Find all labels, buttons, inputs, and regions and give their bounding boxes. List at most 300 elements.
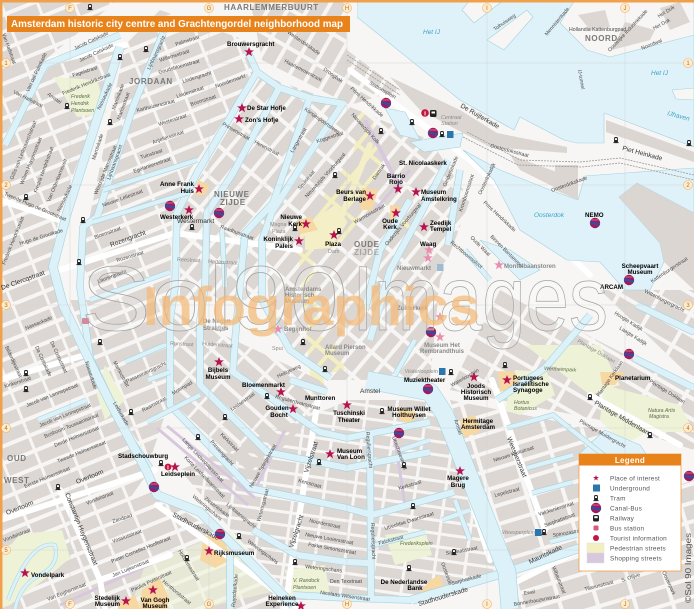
street labels: Weteringschans — [305, 564, 343, 575]
places of interest: Allard Pierson — [325, 345, 366, 351]
street labels: Stationsplein — [368, 81, 397, 101]
street labels: Tilanusstraat — [584, 579, 615, 593]
district labels: OUDE — [354, 240, 380, 249]
street labels: Het Dok — [652, 17, 672, 32]
district labels: JORDAAN — [129, 77, 173, 86]
places of interest: Scheepvaart — [622, 263, 658, 270]
street labels: Magistra — [649, 414, 669, 420]
street labels: Jacob van Lennepstraat — [26, 382, 80, 409]
places of interest: Theater — [338, 417, 361, 424]
street labels: Utrechtsestraat — [390, 436, 408, 471]
places of interest: Museum — [421, 189, 447, 196]
street labels: Waterlooplein — [450, 368, 480, 389]
street labels: Mauritskade — [528, 544, 564, 566]
grid reference letters: F — [68, 6, 72, 12]
water labels: Het IJ — [423, 29, 441, 36]
legend: railway: Railway — [610, 516, 635, 522]
places of interest: Zon's Hofje — [245, 117, 279, 124]
places of interest: Kerk — [383, 224, 397, 231]
shopping streets — [60, 120, 410, 605]
street labels: Bonnerhauzenstraat — [513, 594, 561, 608]
street labels: Utrechtse Dwarsstraat — [384, 511, 435, 532]
street labels: Oosterdoksdijk — [477, 162, 497, 196]
street labels: Derde Helmersstraat — [54, 425, 101, 449]
street labels: Lindengracht — [182, 70, 213, 85]
street labels: Jacob Catskade — [73, 31, 110, 52]
places of interest: Kerk — [288, 221, 303, 228]
street labels: Marnixstraat — [111, 360, 130, 389]
places of interest: Tempel — [430, 226, 451, 233]
street labels: Eerste Helmersstraat — [24, 466, 71, 490]
street labels: Spuistraat — [297, 169, 317, 191]
district labels: NIEUWE — [214, 190, 250, 199]
grid reference letters: 4 — [4, 426, 8, 432]
grid reference letters: F — [68, 602, 72, 608]
street labels: Ewal — [523, 589, 535, 597]
street labels: Damrak — [372, 162, 387, 181]
street labels: Lepelstraat — [494, 486, 521, 499]
places of interest: Joods — [467, 383, 486, 390]
street labels: Noorderstraat — [309, 518, 341, 531]
street labels: Vondelstraat — [3, 527, 32, 544]
street labels: Van Eeghenstraat — [47, 582, 87, 603]
street labels: Rozengracht — [109, 229, 147, 249]
street labels: V. Randock — [293, 578, 320, 584]
street labels: Geldersekade — [442, 155, 460, 188]
street labels: Prins Hendrikkade — [349, 86, 384, 119]
street labels: Westzijde Marnixstraat — [93, 144, 119, 196]
street labels: Nassaukade — [56, 184, 74, 213]
street labels: Fredrik Hendrikstraat — [33, 146, 56, 194]
street labels: Sarphatistraat — [544, 512, 577, 529]
street labels: Nieuwe Kerkstraat — [493, 445, 535, 464]
street labels: Laagte Kadijk — [618, 326, 648, 348]
legend: underground: Underground — [610, 486, 650, 492]
places of interest: Berlage — [343, 196, 367, 203]
street labels: Van Hallstraat — [0, 33, 17, 65]
places of interest: Zeedijk — [430, 220, 452, 227]
underground stations: Waterlooplein — [405, 369, 438, 375]
street labels: Het Dok — [657, 4, 676, 20]
places of interest: Museum — [205, 374, 231, 381]
street labels: Amstel — [46, 92, 62, 106]
street labels: Lijnbaansgracht — [146, 35, 168, 71]
street labels: Willemsstraat — [159, 48, 191, 64]
street labels: Marnixkade — [111, 83, 126, 111]
street labels: Vijzelstraat — [303, 441, 320, 474]
street labels: Valckenierstraat — [538, 501, 575, 518]
street labels: Huidenstraat — [202, 341, 233, 350]
places of interest: Gouden — [265, 405, 289, 412]
street labels: Oosterdoksstraat — [489, 143, 530, 159]
places of interest: NEMO — [585, 212, 604, 219]
street labels: Prinsengracht — [209, 439, 235, 468]
places of interest: Portugees — [513, 375, 544, 382]
places of interest: Hermitage — [463, 418, 494, 425]
street labels: Jacob Catskade — [78, 43, 115, 64]
street labels: Korte Leidsedwarsstraat — [183, 455, 226, 500]
canal-bus stops — [149, 98, 694, 539]
legend: place of interest: Place of interest — [610, 476, 660, 482]
grid reference letters: 2 — [686, 183, 690, 189]
street labels: Plantage Kerklaan — [596, 360, 625, 398]
places of interest: Montelbaanstoren — [504, 264, 556, 270]
street labels: Raamstraat — [141, 396, 168, 414]
street labels: Hortus — [514, 400, 530, 406]
street labels: Nieuwezijds Kolk — [350, 112, 380, 146]
places of interest: Bloemenmarkt — [242, 382, 285, 389]
street labels: Van der Palmkade — [25, 52, 49, 93]
street labels: Lijnbaansgracht — [106, 144, 125, 181]
street labels: Kerkstraat — [398, 479, 423, 492]
grid reference letters: 3 — [4, 303, 8, 309]
street labels: Regulierdwarsstraat — [274, 394, 321, 412]
grid reference letters: I — [486, 6, 488, 12]
pedestrian streets — [295, 110, 420, 395]
street labels: Oosterpark — [660, 570, 677, 596]
street labels: Vijzelgracht — [288, 514, 305, 549]
street labels: Constantijn Huygensstraat — [63, 492, 99, 567]
street labels: S. Olijve — [621, 572, 641, 584]
street labels: Hobbemastraat — [176, 549, 200, 583]
places of interest: Experience — [265, 601, 299, 608]
grid reference letters: 4 — [686, 426, 690, 432]
street labels: Prinsenstraat — [221, 122, 251, 142]
central station tourist info and railway icons: i — [424, 110, 426, 118]
places of interest: Museum Willet — [387, 406, 431, 413]
street labels: Nicolaas Witsenstraat — [320, 590, 371, 603]
street labels: Oosterdokskade — [551, 175, 588, 194]
places of interest: De Negen — [203, 319, 231, 325]
water labels — [423, 29, 691, 219]
street labels: Weteringschans — [246, 539, 279, 566]
street labels: Korsjespoortsteeg — [303, 107, 341, 136]
street labels: Rechtboomssloot — [449, 240, 484, 271]
street labels: Oudezijds Voorburgwal — [384, 203, 423, 247]
watermark: Infographics: Infographics — [143, 275, 480, 337]
street labels: Frederik Hendrikstraat — [1, 215, 26, 266]
places of interest: Anne Frank — [160, 181, 195, 188]
street labels: Pieter Cornelisz Hooftstraat — [111, 535, 172, 565]
street labels: Mennistenkade — [544, 6, 571, 37]
station and Kattenburg land — [390, 77, 694, 290]
street labels: Hugo de Grootkade — [19, 228, 64, 247]
places of interest: Museum Het — [424, 343, 460, 349]
street labels: Piet Heinkade — [621, 145, 663, 163]
street labels: Fokke Simonszstraat — [308, 542, 357, 556]
street labels: Frederiksplein — [400, 541, 433, 547]
places of interest: Rembrandthuis — [420, 349, 465, 355]
places of interest: Stedelijk — [95, 595, 121, 602]
street labels: Den Texstraat — [330, 579, 362, 585]
street labels: Passeerdersgracht — [125, 361, 168, 385]
street labels: Natura Artis — [648, 408, 676, 414]
places of interest: De Nederlandse — [381, 579, 428, 586]
places of interest: Israëlitische — [513, 381, 549, 388]
street labels: Karthuizersstraat — [136, 98, 176, 114]
street labels: Ruysdaelkade — [231, 574, 240, 607]
district labels: OUD — [7, 454, 27, 463]
grid reference letters: J — [624, 602, 626, 608]
street labels: Wibautstraat — [550, 566, 567, 595]
places of interest: Centraal — [441, 115, 462, 121]
district labels: NOORD — [585, 34, 618, 43]
street labels: Plantsoen — [293, 585, 316, 591]
street labels: Palmstraat — [175, 34, 201, 48]
legend header: Legend — [615, 456, 645, 465]
places of interest: Museum — [627, 269, 653, 276]
railway tracks — [347, 55, 694, 180]
places of interest: Westerkerk — [160, 214, 194, 221]
street labels: Goudsbloemstraat — [158, 58, 201, 76]
grid reference letters: 3 — [686, 303, 690, 309]
street labels: Gillis van Ledenberchstraat — [9, 120, 39, 181]
street labels: Tuinstraat — [140, 148, 164, 161]
street labels: Droogbak — [322, 67, 344, 85]
places of interest: Straatjes — [203, 326, 229, 332]
street labels: Tweede Helmersstraat — [57, 440, 107, 465]
street labels: Stadhouderskade — [418, 586, 469, 608]
street labels: Nieuwe Leliestraat — [102, 188, 144, 209]
grid reference letters: I — [486, 602, 488, 608]
places of interest: Brug — [451, 482, 465, 489]
places of interest: Munttoren — [305, 395, 335, 402]
street labels: Reestraat — [177, 257, 201, 264]
places of interest: Museum — [285, 299, 309, 305]
places of interest: Tuschinski — [333, 410, 365, 417]
street labels: Spinozastraat — [552, 527, 585, 539]
places of interest: Holthuysen — [392, 412, 426, 419]
street labels: Vondelstraat — [86, 490, 115, 507]
places of interest: Koninklijk — [263, 236, 294, 243]
places of interest: Heineken — [268, 595, 296, 602]
street labels: Spui — [272, 346, 283, 352]
places of interest: Plaza — [325, 241, 341, 248]
grid reference letters: G — [207, 602, 212, 608]
places of interest: Museum — [95, 601, 120, 608]
street labels: Nassaukade — [83, 361, 98, 390]
street labels: Tolhuisweg — [493, 13, 517, 33]
street labels: Hendrik — [71, 101, 89, 107]
street labels: Westermarkt — [177, 218, 214, 225]
places of interest: Barrio — [387, 173, 405, 180]
street labels: Westerdokskade — [286, 30, 321, 57]
legend: shopping streets: Shopping streets — [610, 556, 662, 562]
street labels: Kerkstraat — [297, 478, 322, 490]
places of interest: Dam — [328, 249, 340, 255]
street labels: Noordwal — [641, 38, 663, 52]
street labels: Frederik — [71, 94, 90, 100]
places of interest: Synagoge — [513, 387, 543, 394]
grid reference letters: 5 — [4, 548, 8, 554]
street labels: Anjeliersstraat — [152, 129, 185, 146]
street labels: Falckstraat — [378, 534, 405, 547]
central station tourist info and railway icons — [82, 109, 436, 471]
street labels: Warmoesstraat — [353, 203, 387, 226]
legend: tram: Tram — [610, 496, 626, 502]
places of interest: Museum — [337, 448, 363, 455]
street labels: Zandpad — [112, 513, 133, 525]
places of interest: Planetarium — [615, 375, 651, 382]
street labels: Egelantiersstraat — [133, 156, 172, 175]
street labels: De Ruijterkade — [459, 103, 501, 131]
street labels: Oosteinde — [439, 562, 453, 586]
street labels: Leidsestraat — [230, 391, 257, 413]
street labels: Marnixkade — [91, 133, 105, 161]
street labels: Sarphatistraat — [445, 545, 479, 557]
watermark: Sol90 Images — [81, 248, 608, 350]
street labels: Jan Luijkenstraat — [112, 558, 151, 579]
legend: pedestrian streets: Pedestrian streets — [610, 546, 666, 552]
places of interest: Historisch — [461, 389, 491, 396]
street labels: Heiligeweg — [276, 364, 302, 380]
street labels: Hartenstraat — [208, 259, 238, 267]
places of interest: Rijksmuseum — [214, 550, 255, 557]
street labels: Herenstraat — [253, 139, 280, 158]
grid reference letters: 2 — [4, 183, 8, 189]
street labels: Binnen Bantammer — [489, 234, 524, 270]
street labels: Noordermarkt — [215, 73, 247, 90]
places of interest: Beurs van — [336, 189, 366, 196]
street labels: Sarphatikade — [451, 573, 482, 587]
district labels: ZIJDE — [220, 198, 246, 207]
street labels: Weteringstraat — [256, 488, 271, 523]
street labels: Kattenburgerstraat — [650, 256, 690, 285]
street labels: Nassaukade — [24, 315, 53, 332]
street labels: Reguliersgracht — [369, 523, 376, 560]
street labels: Boomstraat — [190, 94, 217, 108]
copyright: ©Sol 90 Images — [683, 533, 693, 603]
water: IJ and Oosterdok — [347, 0, 694, 460]
street labels: IJ-tunnel — [576, 69, 585, 90]
attraction highlight zones — [118, 180, 652, 609]
places of interest: St. Nicolaaskerk — [399, 160, 447, 167]
street labels: Oostelijke Industriekade — [607, 9, 649, 53]
watermark: Sol90 Images: Images — [352, 248, 608, 350]
grid reference letters: J — [624, 6, 626, 12]
places of interest: Station — [441, 121, 458, 127]
street labels: Bilderdijkstraat — [3, 345, 23, 379]
street labels: Willem Huygensstraat — [19, 136, 44, 186]
water labels: IJhaven — [666, 110, 691, 123]
Dam square — [305, 205, 348, 250]
street labels: Westerstraat — [158, 113, 188, 128]
street labels: Kerkstraat — [219, 432, 240, 454]
street labels: Plantage Doklaan — [648, 379, 686, 405]
places of interest: Paleis — [275, 243, 294, 250]
street labels: Jacob van Lennepstraat — [39, 402, 93, 429]
places of interest: Van Gogh — [141, 597, 170, 604]
district labels: HAARLEMMERBUURT — [224, 3, 319, 12]
places of interest: Leidseplein — [161, 471, 195, 478]
water labels: Het IJ — [651, 70, 669, 77]
street labels: Van Oldenbarnevelt — [46, 158, 69, 203]
places of interest: Magna — [270, 222, 286, 228]
places of interest: ARCAM — [600, 284, 623, 291]
places of interest: Oude — [382, 218, 398, 225]
district labels: ZIJDE — [354, 248, 380, 257]
street labels: Raadhuisstraat — [219, 224, 255, 242]
street labels: Hoogte Kadijk — [613, 311, 644, 333]
street labels: Nieuwezijds Voorburgwal — [304, 152, 347, 199]
places of interest: Historisch — [285, 293, 315, 299]
legend — [579, 454, 681, 571]
legend: bus station: Bus station — [610, 526, 645, 532]
places of interest: Rojo — [389, 179, 403, 186]
water labels: Oosterdok — [534, 212, 565, 219]
district labels: WEST — [4, 476, 30, 485]
places of interest: Huis — [181, 188, 195, 195]
street labels: Leidsekade — [111, 401, 130, 427]
district labels — [4, 3, 618, 485]
underground stations: Weesperplein — [502, 530, 535, 536]
places of interest: Van Loon — [337, 454, 365, 461]
street labels: Hollandia Kattenburgpad — [569, 27, 626, 33]
legend: tourist information: Tourist information — [610, 536, 667, 542]
places of interest: Bank — [407, 585, 423, 592]
street labels: Bloemstraat — [94, 226, 122, 241]
street labels: Langestraat — [290, 127, 309, 154]
street labels: Overtoom — [75, 468, 105, 486]
places of interest: Stadschouwburg — [118, 453, 168, 460]
title banner: Amsterdam historic city centre and Grachtengordel neighborhood map — [11, 19, 343, 30]
street labels: Amstel — [360, 388, 381, 395]
street labels: Plantage Doklaan — [576, 339, 616, 365]
street labels: Da Costastraat — [48, 340, 68, 375]
street labels: Tweede Hugo de Grootstraat — [3, 191, 67, 223]
places of interest: Waag — [420, 241, 436, 248]
street labels: Botanicus — [514, 406, 537, 412]
places of interest: Nieuwmarkt — [397, 266, 431, 272]
street labels: Amstel — [452, 419, 463, 436]
street labels: Lijnbaansgracht — [225, 502, 257, 530]
places of interest: Begijnhof — [284, 327, 313, 333]
street labels: Wittenburgergracht — [643, 288, 686, 314]
street labels: Weesperstraat — [505, 436, 528, 479]
northern land: Noord and piers — [462, 0, 694, 100]
street labels: Plantsoen — [71, 108, 94, 114]
street labels: Nassaukade — [96, 82, 114, 111]
grid reference letters: 1 — [686, 61, 690, 67]
grid reference letters: H — [345, 602, 349, 608]
street labels: Da Costakade — [33, 345, 53, 378]
street labels: Kromboomssloot — [458, 173, 476, 213]
street labels: Bosboom Toussaintstraat — [44, 412, 100, 440]
street labels: Molenpad — [171, 380, 194, 397]
street labels: Wertheimpark — [544, 366, 577, 374]
places of interest: Vondelpark — [31, 572, 65, 579]
underground stations — [405, 131, 542, 536]
places of interest: Amsterdams — [285, 287, 322, 293]
street labels: Weteringschans — [191, 494, 223, 523]
places of interest: Bocht — [270, 412, 288, 419]
places of interest: De Star Hofje — [247, 105, 286, 112]
street labels: Overtoom — [5, 499, 35, 517]
street labels: Rozenstraat — [116, 250, 145, 264]
street labels: Honthorststraat — [161, 579, 192, 607]
places of interest: Zuiderkerk — [397, 306, 428, 312]
grid reference letters: 1 — [4, 61, 8, 67]
street labels: Prins Hendrikkade — [482, 200, 517, 233]
street labels: Lindenstraat — [176, 85, 205, 100]
street labels: Koggestraat — [316, 130, 345, 145]
watermark: Sol90 Images: Sol90 — [81, 248, 348, 350]
street labels: Lauriergracht — [97, 269, 128, 285]
title banner — [7, 16, 350, 32]
places of interest: Plaza — [272, 229, 286, 235]
grid reference letters: G — [207, 6, 212, 12]
street labels: Reguliersgracht — [364, 432, 373, 469]
